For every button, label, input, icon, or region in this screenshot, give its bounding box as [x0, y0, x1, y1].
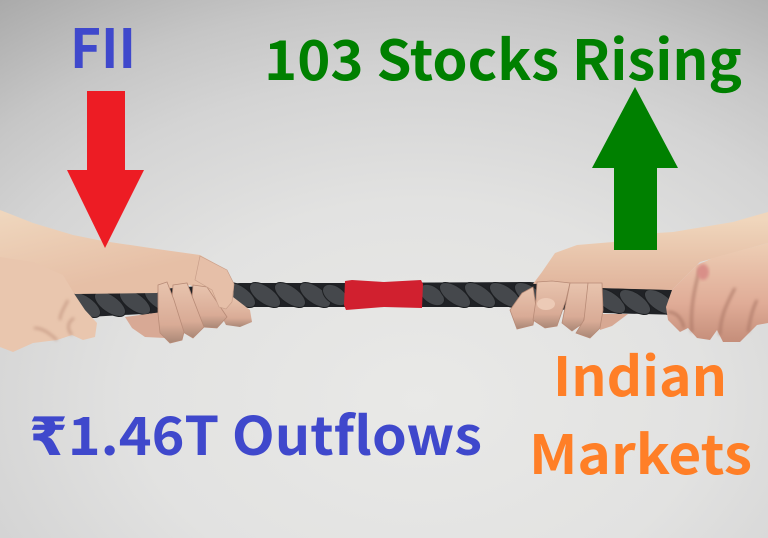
second finger: [533, 281, 570, 328]
label: FII: FII: [70, 5, 136, 84]
front fist shading: [34, 300, 74, 340]
green arrow up: [592, 87, 678, 250]
front fist: [0, 257, 97, 352]
first finger: [158, 282, 184, 343]
right hands: [510, 212, 768, 342]
label: Indian Markets: [529, 333, 752, 490]
red rope marker: [344, 280, 423, 310]
second finger: [172, 283, 204, 338]
third finger: [562, 283, 588, 331]
rope: [65, 278, 680, 322]
first finger: [510, 287, 536, 329]
back arm of right hand: [533, 212, 768, 290]
nail tip: [537, 298, 555, 310]
third finger: [192, 285, 227, 328]
front fist shading: [668, 268, 757, 335]
lower palm of left hand: [125, 312, 165, 338]
label: Indian Markets: Markets: [529, 411, 752, 490]
pinky finger: [218, 297, 252, 327]
fourth finger: [576, 283, 603, 338]
back arm of left hand: [0, 210, 234, 309]
label: outflows: ₹1.46T Outflows: [29, 395, 482, 471]
knuckle redness: [697, 264, 709, 280]
label: Indian Markets: Indian: [553, 333, 727, 412]
heading: 103 Stocks Rising: 103 Stocks Rising: [264, 16, 742, 96]
front fist: [666, 243, 768, 342]
lower palm of right hand: [600, 314, 628, 330]
left hands: [0, 210, 252, 352]
curled fingertip: [195, 256, 234, 309]
red arrow down: [67, 91, 144, 248]
